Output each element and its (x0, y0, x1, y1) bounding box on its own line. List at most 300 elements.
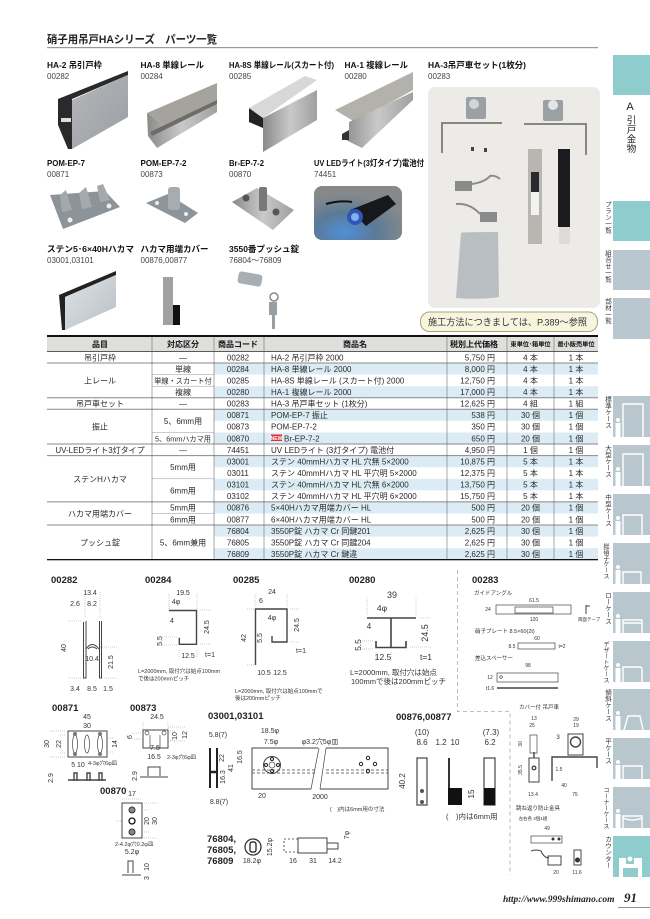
drawing 03001,03101: 16.3 (220, 770, 227, 784)
product stainless hakama (47, 244, 135, 330)
footer: url and page number: http://www.999shimano.com (503, 895, 615, 905)
drawing 00284: L=2000mm, 取付穴は始点100mm (138, 667, 220, 675)
product stainless hakama: 03001,03101 (47, 256, 94, 265)
drawing 00280: 24.5 (420, 624, 430, 642)
table column: 商品名: 5×40Hハカマ用端カバー HL (271, 503, 372, 513)
drawing 00282: 2.6 (70, 601, 80, 608)
drawing 00280 (349, 575, 446, 686)
drawing cover roller: 左右各 2個1組 (519, 815, 548, 822)
tab: 平ケース (604, 738, 650, 779)
drawing 00282: 40 (61, 644, 68, 652)
table column: 束単位: 30 個 (521, 526, 540, 536)
product HA-3 set (428, 60, 600, 308)
table column: 商品コード: 00876 (227, 504, 250, 513)
table column: 束単位: 4 組 (523, 399, 538, 409)
tab: 組合せ一覧 (604, 249, 650, 290)
product HA-2 (47, 60, 128, 149)
table column: 価格: 12,750 円 (460, 376, 495, 386)
table column: 対応区分 (154, 353, 212, 548)
drawing 00283: 8.5 (509, 644, 516, 650)
drawing cover roller: 29 (573, 717, 579, 723)
table column: 束単位: 4 本 (523, 387, 538, 397)
drawing 00282: 10.4 (85, 656, 99, 663)
tab: 中型ケース (604, 493, 650, 535)
drawing 00280: 100mmで後は200mmピッチ (351, 676, 446, 686)
drawing 00282: 13.4 (83, 590, 97, 597)
table column: 束単位: 30 個 (521, 549, 540, 559)
drawing 00285: 10.5 (257, 670, 271, 677)
table column: 対応区分: 5mm用 (170, 463, 196, 472)
drawing 03001,03101: 41 (228, 764, 235, 772)
table column: 商品名: NEW (271, 436, 283, 442)
drawing 00285 (233, 575, 323, 702)
drawing cover roller: 40 (561, 783, 567, 789)
drawing 00284: で後は200mmピッチ (138, 674, 189, 682)
drawing 00282: 21.5 (108, 655, 115, 669)
product UV LED light (314, 158, 424, 240)
drawing 76804,76805,76809: 31 (309, 858, 317, 865)
drawing 00282: 3.4 (70, 686, 80, 693)
table column: 価格 (460, 353, 495, 559)
table column: 最小販売単位: 1 本 (569, 352, 583, 362)
drawing 00282: 1.5 (103, 686, 113, 693)
product HA-2: 00282 (47, 72, 70, 81)
table column: 価格: 538 円 (471, 411, 495, 420)
drawing 00871: 14 (112, 740, 119, 748)
table column: 商品コード: 00873 (227, 423, 250, 432)
drawing 00871: 5 10 (71, 762, 85, 769)
drawing cover roller (516, 703, 597, 876)
tab: コーナーケース (602, 787, 650, 829)
table column: 価格: 500 円 (471, 515, 495, 524)
tab: 大型ケース: 大型ケース (604, 444, 612, 478)
table column: 対応区分: ― (179, 400, 187, 409)
product HA-8 (140, 60, 217, 148)
drawing 76804,76805,76809 (207, 830, 351, 867)
tab: 平ケース: 平ケース (604, 738, 612, 764)
drawing 00871 (44, 703, 119, 783)
table column: 最小販売単位: 1 個 (569, 503, 583, 513)
table column: 対応区分: 5、6mm兼用 (160, 538, 206, 548)
table column: 最小販売単位: 1 個 (569, 514, 583, 524)
table column: 価格: 17,000 円 (460, 388, 495, 397)
drawing 00876,00877: ( )内は6mm用 (446, 811, 498, 821)
tab: 傾斜ケース: 傾斜ケース (604, 688, 612, 722)
table column: 商品コード: 00871 (227, 411, 250, 420)
product hakama end cover: ハカマ用端カバー (140, 244, 208, 254)
drawing 00284: 4 (170, 618, 174, 625)
drawing 00873: 7.5 (150, 745, 160, 752)
drawing 00285: 24 (268, 589, 276, 596)
product push lock (229, 244, 299, 329)
product POM-EP-7 (47, 158, 120, 229)
drawing cover roller: 49 (544, 826, 550, 832)
table column: 束単位: 5 本 (523, 480, 538, 490)
table column: 最小販売単位: 1 本 (569, 468, 583, 478)
drawing 00280: L=2000mm, 取付穴は始点 (350, 667, 437, 677)
drawing 00876,00877: 6.2 (484, 738, 496, 747)
product POM-EP-7: 00871 (47, 170, 70, 179)
drawing 00285: 5.5 (257, 633, 264, 643)
drawing 76804,76805,76809: 76804, (207, 834, 236, 845)
drawing 03001,03101: 22 (219, 754, 226, 762)
table column: 品目: プッシュ錠 (80, 538, 120, 548)
table: parts list (47, 335, 598, 560)
drawing 00285: 12.5 (273, 670, 287, 677)
table column: 束単位: 4 本 (523, 364, 538, 374)
drawing 00873: 2.9 (132, 771, 139, 781)
drawing 00876,00877: (7.3) (483, 728, 500, 737)
drawing 00871: 4-3φ穴6φ皿 (88, 760, 118, 767)
drawing 00283: 60 (534, 636, 540, 642)
table column: 商品コード: 00280 (227, 388, 250, 397)
product HA-1: HA-1 複線レール (344, 60, 408, 70)
table column: 価格: 2,625 円 (465, 538, 495, 548)
drawing cover roller: 3 (556, 734, 560, 741)
table column: 商品名: Br-EP-7-2 (284, 434, 320, 443)
table header: 品目 (92, 340, 108, 349)
table column: 商品コード: 00284 (227, 365, 250, 374)
product push lock: 3550番プッシュ錠 (229, 244, 299, 254)
drawing 00876,00877: 40.2 (398, 773, 407, 789)
tab: 標準ケース: 標準ケース (604, 395, 612, 429)
tab: 総硝子ケース (602, 542, 650, 584)
table column: 価格: 650 円 (471, 434, 495, 443)
drawing 00284 (138, 575, 220, 682)
table column: 束単位: 1 個 (523, 445, 538, 455)
drawing 00873 (127, 703, 197, 781)
drawing 00285: 42 (241, 634, 248, 642)
table column: 商品名: POM-EP-7-2 (271, 423, 317, 432)
table column: 束単位: 20 個 (521, 514, 540, 524)
footer: url and page number (503, 890, 650, 908)
table column: 価格: 5,750 円 (465, 353, 495, 362)
table column: 最小販売単位: 1 個 (569, 433, 583, 443)
table column: 対応区分: 5、6mm用 (164, 417, 202, 426)
product UV LED light: 74451 (314, 170, 337, 179)
table column: 商品名: 3550P錠 ハカマ Cr 同鍵201 (271, 526, 371, 536)
drawing 00280: t=1 (420, 652, 432, 662)
title: 硝子用吊戸HAシリーズ パーツ一覧 (47, 32, 217, 46)
table column: 商品コード: 00282 (227, 353, 250, 362)
drawing 00282: 8.5 (87, 686, 97, 693)
drawing 00876,00877: 8.6 (416, 738, 428, 747)
product POM-EP-7-2 (140, 158, 198, 223)
product push lock: 76804～76809 (229, 256, 282, 265)
drawing 00283: 差込スペーサー (475, 654, 513, 662)
drawing 00871: 30 (83, 723, 91, 730)
drawing 00285: 6 (259, 598, 263, 605)
table column: 商品コード: 76805 (227, 538, 250, 548)
table column: 品目: ステンHハカマ (73, 475, 127, 484)
table column: 商品名: 3550P錠 ハカマ Cr 同鍵204 (271, 538, 371, 548)
drawing 00283: 00283 (472, 575, 498, 586)
table column: 品目: 吊戸車セット (76, 399, 124, 409)
drawing 00283: 硝子プレート 8.5×60(2t) (475, 627, 535, 635)
table column: 商品名: HA-3 吊戸車セット (1枚分) (271, 399, 368, 409)
product stainless hakama: ステン5･6×40Hハカマ (47, 244, 135, 254)
table header: 最小販売単位 (557, 340, 595, 348)
table column: 対応区分: ― (179, 446, 187, 455)
table column: 対応区分: 単線・スカート付 (154, 376, 212, 386)
tab: プラン一覧: プラン一覧 (604, 201, 612, 235)
drawing 00283: 12 (487, 675, 493, 681)
drawing 03001,03101: 2000 (312, 794, 328, 801)
drawing 76804,76805,76809: 76809 (207, 856, 233, 867)
tab: 傾斜ケース (604, 688, 650, 730)
table column: 価格: 2,625 円 (465, 550, 495, 559)
drawing 00870: 3 (144, 876, 151, 880)
drawing 00280: 5.5 (353, 639, 363, 651)
drawing 00283: 61.5 (529, 598, 539, 604)
table column: 価格: 350 円 (471, 423, 495, 432)
table column: 価格: 500 円 (471, 504, 495, 513)
drawing 00871: 00871 (52, 703, 79, 714)
table column: 価格: 2,625 円 (465, 527, 495, 536)
tab: デザートケース: デザートケース (602, 640, 609, 683)
drawing 00283: 120 (530, 617, 538, 623)
tab: 部材一覧 (604, 298, 650, 339)
drawing 00283: 24 (485, 607, 491, 613)
panel: product photos (47, 60, 600, 330)
drawing 00284: 4φ (172, 599, 181, 606)
product HA-3 set: HA-3吊戸車セット(1枚分) (428, 60, 526, 70)
drawing 00873: 12 (182, 731, 189, 739)
product POM-EP-7-2: 00873 (140, 170, 163, 179)
drawing 03001,03101: 16.5 (237, 750, 244, 764)
table column: 価格: 15,750 円 (460, 492, 495, 501)
tab: 標準ケース (604, 395, 650, 437)
table column: 商品名: POM-EP-7 振止 (271, 410, 328, 420)
table column: 最小販売単位: 1 本 (569, 480, 583, 490)
drawing 76804,76805,76809: 18.2φ (243, 858, 262, 865)
product HA-8: HA-8 単線レール (140, 60, 204, 70)
table column: 商品コード: 76809 (227, 550, 250, 559)
tab: カウンター: カウンター (604, 836, 612, 868)
drawing 00282: 00282 (51, 575, 77, 586)
table column: 商品コード: 74451 (227, 446, 250, 455)
table column: 最小販売単位: 1 本 (569, 376, 583, 386)
drawing 00280: 00280 (349, 575, 375, 586)
drawing 00873: 16.5 (147, 754, 161, 761)
table column: 価格: 12,375 円 (460, 469, 495, 478)
product Br-EP-7-2 (229, 158, 294, 230)
table rules (47, 335, 598, 560)
drawing 76804,76805,76809: 7φ (344, 830, 351, 839)
table column: 最小販売単位: 1 個 (569, 410, 583, 420)
table column: 商品名: HA-8S 単線レール (スカート付) 2000 (271, 376, 405, 386)
drawing cover roller: 11.6 (572, 870, 582, 876)
drawing 00870 (100, 786, 159, 880)
table column: 商品名: UV LEDライト (3灯タイプ) 電池付 (271, 445, 394, 455)
table header (92, 339, 595, 349)
table column: 対応区分: 6mm用 (170, 486, 196, 495)
table column: 商品名: ステン 40mmHハカマ HL 穴無 5×2000 (271, 456, 409, 466)
tab: A 引戸金物 (613, 55, 650, 154)
table column: 最小販売単位: 1 本 (569, 364, 583, 374)
table column: 最小販売単位: 1 個 (569, 526, 583, 536)
drawing cover roller: 1.5 (556, 767, 563, 773)
drawing 00870: 00870 (100, 786, 126, 797)
table column: 商品コード: 03001 (227, 458, 250, 466)
drawing 00876,00877: (10) (415, 728, 429, 737)
product Br-EP-7-2: 00870 (229, 170, 252, 179)
tab: カウンター (604, 836, 650, 877)
drawing 03001,03101: 20 (258, 793, 266, 800)
drawing 00283: t1.6 (486, 686, 494, 692)
product HA-8S: HA-8S 単線レール(スカート付) (229, 60, 334, 70)
table column: 対応区分: 5mm用 (170, 504, 196, 513)
product POM-EP-7: POM-EP-7 (47, 158, 85, 168)
table column: 最小販売単位: 1 個 (569, 445, 583, 455)
table column: 品目: 吊引戸枠 (84, 352, 116, 362)
table column: 束単位: 4 本 (523, 376, 538, 386)
drawing cover roller: 35.5 (518, 765, 524, 775)
new badge (271, 434, 282, 441)
drawing 00876,00877: 1.2 (435, 738, 447, 747)
table column: 束単位: 30 個 (521, 538, 540, 548)
table column: 対応区分: 5、6mmハカマ用 (155, 434, 211, 443)
drawing 00873: 6 (127, 735, 134, 739)
table column: 商品名: ステン 40mmHハカマ HL 穴無 6×2000 (271, 480, 409, 490)
drawing 76804,76805,76809: 14.2 (328, 858, 342, 865)
table column: 商品コード: 03011 (227, 469, 249, 478)
drawing 00285: 4φ (268, 615, 277, 622)
table column: 商品コード: 00285 (227, 376, 250, 386)
tab: 大型ケース (604, 444, 650, 486)
table column: 最小販売単位: 1 組 (569, 399, 583, 409)
tab: プラン一覧 (604, 201, 650, 241)
table column: 対応区分: ― (179, 353, 187, 362)
product hakama end cover: 00876,00877 (140, 256, 188, 265)
tab: A 引戸金物: 引戸金物 (624, 115, 636, 154)
table column: 商品名: HA-2 吊引戸枠 2000 (271, 352, 344, 362)
drawing cover roller: 13 (531, 716, 537, 722)
table column: 最小販売単位: 1 本 (569, 491, 583, 501)
table column: 価格: 13,750 円 (460, 481, 495, 490)
product UV LED light: UV LEDライト(3灯タイプ)電池付 (314, 158, 424, 168)
table column: 商品名: 3550P錠 ハカマ Cr 鍵違 (271, 549, 357, 559)
table column: 価格: 4,950 円 (465, 446, 495, 455)
drawing 00280: 4 (367, 622, 372, 631)
callout: construction note: 施工方法につきましては、P.389～参照 (428, 316, 587, 328)
product HA-8: 00284 (140, 72, 163, 81)
table column: 束単位: 30 個 (521, 410, 540, 420)
drawing 00285: t=1 (296, 648, 306, 655)
table column: 最小販売単位: 1 本 (569, 456, 583, 466)
drawing 00284: 00284 (145, 575, 172, 586)
table column: 商品名: HA-1 複線レール 2000 (271, 387, 352, 397)
product POM-EP-7-2: POM-EP-7-2 (140, 158, 187, 168)
drawing 00285: 00285 (233, 575, 260, 586)
table column: 品目: 上レール (84, 376, 116, 386)
drawing 76804,76805,76809: 15.2φ (267, 837, 274, 856)
drawing 00280: 12.5 (375, 652, 392, 662)
table column: 商品コード: 03101 (227, 481, 250, 490)
drawing 00285: 24.5 (294, 618, 301, 632)
drawing 00871: 30 (44, 740, 51, 748)
drawing 00284: 24.5 (204, 620, 211, 634)
product HA-8S: 00285 (229, 72, 252, 81)
tab: 中型ケース: 中型ケース (604, 493, 612, 527)
drawing 00870: 20 (144, 817, 151, 825)
product hakama end cover (140, 244, 208, 325)
drawing 00284: 5.5 (157, 636, 164, 646)
drawing 00283 (472, 575, 601, 692)
table header: 束単位･箱単位 (510, 340, 551, 348)
drawing 00876,00877: 00876,00877 (396, 712, 451, 723)
table column: 商品名: ステン 40mmHハカマ HL 平穴明 6×2000 (271, 492, 417, 501)
table header: 対応区分 (167, 339, 199, 349)
drawing 00871: 2.9 (48, 773, 55, 783)
drawing cover roller: 20 (553, 870, 559, 876)
table column: 最小販売単位: 1 本 (569, 387, 583, 397)
table column: 束単位: 5 本 (523, 456, 538, 466)
drawing 00285: 後は200mmピッチ (235, 694, 281, 702)
callout: construction note (420, 312, 598, 332)
table column: 束単位 (521, 352, 540, 559)
drawing 00283: t=2 (558, 644, 566, 650)
table column: 最小販売単位: 1 個 (569, 538, 583, 548)
tab: 部材一覧: 部材一覧 (604, 298, 612, 325)
table column: 商品名 (271, 352, 417, 559)
drawing 00283: 両面テープ (578, 617, 601, 623)
table column: 商品コード: 76804 (227, 527, 250, 536)
table row shading (47, 337, 598, 560)
drawing 00870: 17 (128, 791, 136, 798)
drawing 03001,03101: φ3.2穴5φ皿 (302, 738, 338, 746)
tab: デザートケース (602, 640, 650, 683)
panel: dimension drawings (44, 570, 601, 880)
table column: 最小販売単位 (569, 352, 583, 559)
table column: 対応区分: 単線 (175, 364, 191, 374)
drawing 00876,00877: 10 (451, 738, 460, 747)
tab: 組合せ一覧: 組合せ一覧 (604, 249, 612, 284)
table column: 商品コード: 03102 (227, 492, 250, 501)
drawing 00873: 2-3φ穴6φ皿 (167, 754, 197, 761)
drawing 00285: L=2000mm, 取付穴は始点100mmで (235, 687, 323, 695)
table column: 束単位: 20 個 (521, 433, 540, 443)
drawing 00876,00877: 15 (467, 789, 476, 798)
tab: ローケース: ローケース (604, 592, 612, 625)
product HA-1: 00280 (344, 72, 367, 81)
drawing cover roller: 13.4 (528, 792, 538, 798)
table column: 品目: 振止 (92, 422, 108, 432)
drawing cover roller: 跳ね返り防止金具 (516, 804, 561, 812)
drawing 03001,03101: ( )内は6mm用の寸法 (330, 805, 385, 813)
drawing 03001,03101: 7.5φ (264, 739, 279, 746)
drawing 00282: 8.2 (87, 601, 97, 608)
drawing 00870: 10 (144, 863, 151, 871)
drawing 00282 (51, 575, 117, 693)
drawing 03001,03101: 03001,03101 (208, 711, 264, 722)
table column: 商品コード: 00877 (227, 515, 250, 524)
table column: 束単位: 5 本 (523, 491, 538, 501)
table header: 税別上代価格 (450, 339, 498, 349)
drawing cover roller: 19 (573, 723, 579, 729)
drawing 03001,03101: 18.5φ (261, 728, 280, 735)
table column: 商品名: 6×40Hハカマ用端カバー HL (271, 514, 372, 524)
table column: 最小販売単位: 1 個 (569, 422, 583, 432)
drawing 00873: 00873 (130, 703, 156, 714)
table column: 最小販売単位: 1 個 (569, 549, 583, 559)
table column: 商品コード: 00870 (227, 434, 250, 443)
drawing cover roller: 30 (518, 741, 524, 747)
table column: 商品名: HA-8 単線レール 2000 (271, 364, 352, 374)
drawing 00284: 12.5 (181, 653, 195, 660)
drawing 00876,00877 (396, 712, 500, 821)
footer: url and page number: 91 (624, 890, 637, 905)
